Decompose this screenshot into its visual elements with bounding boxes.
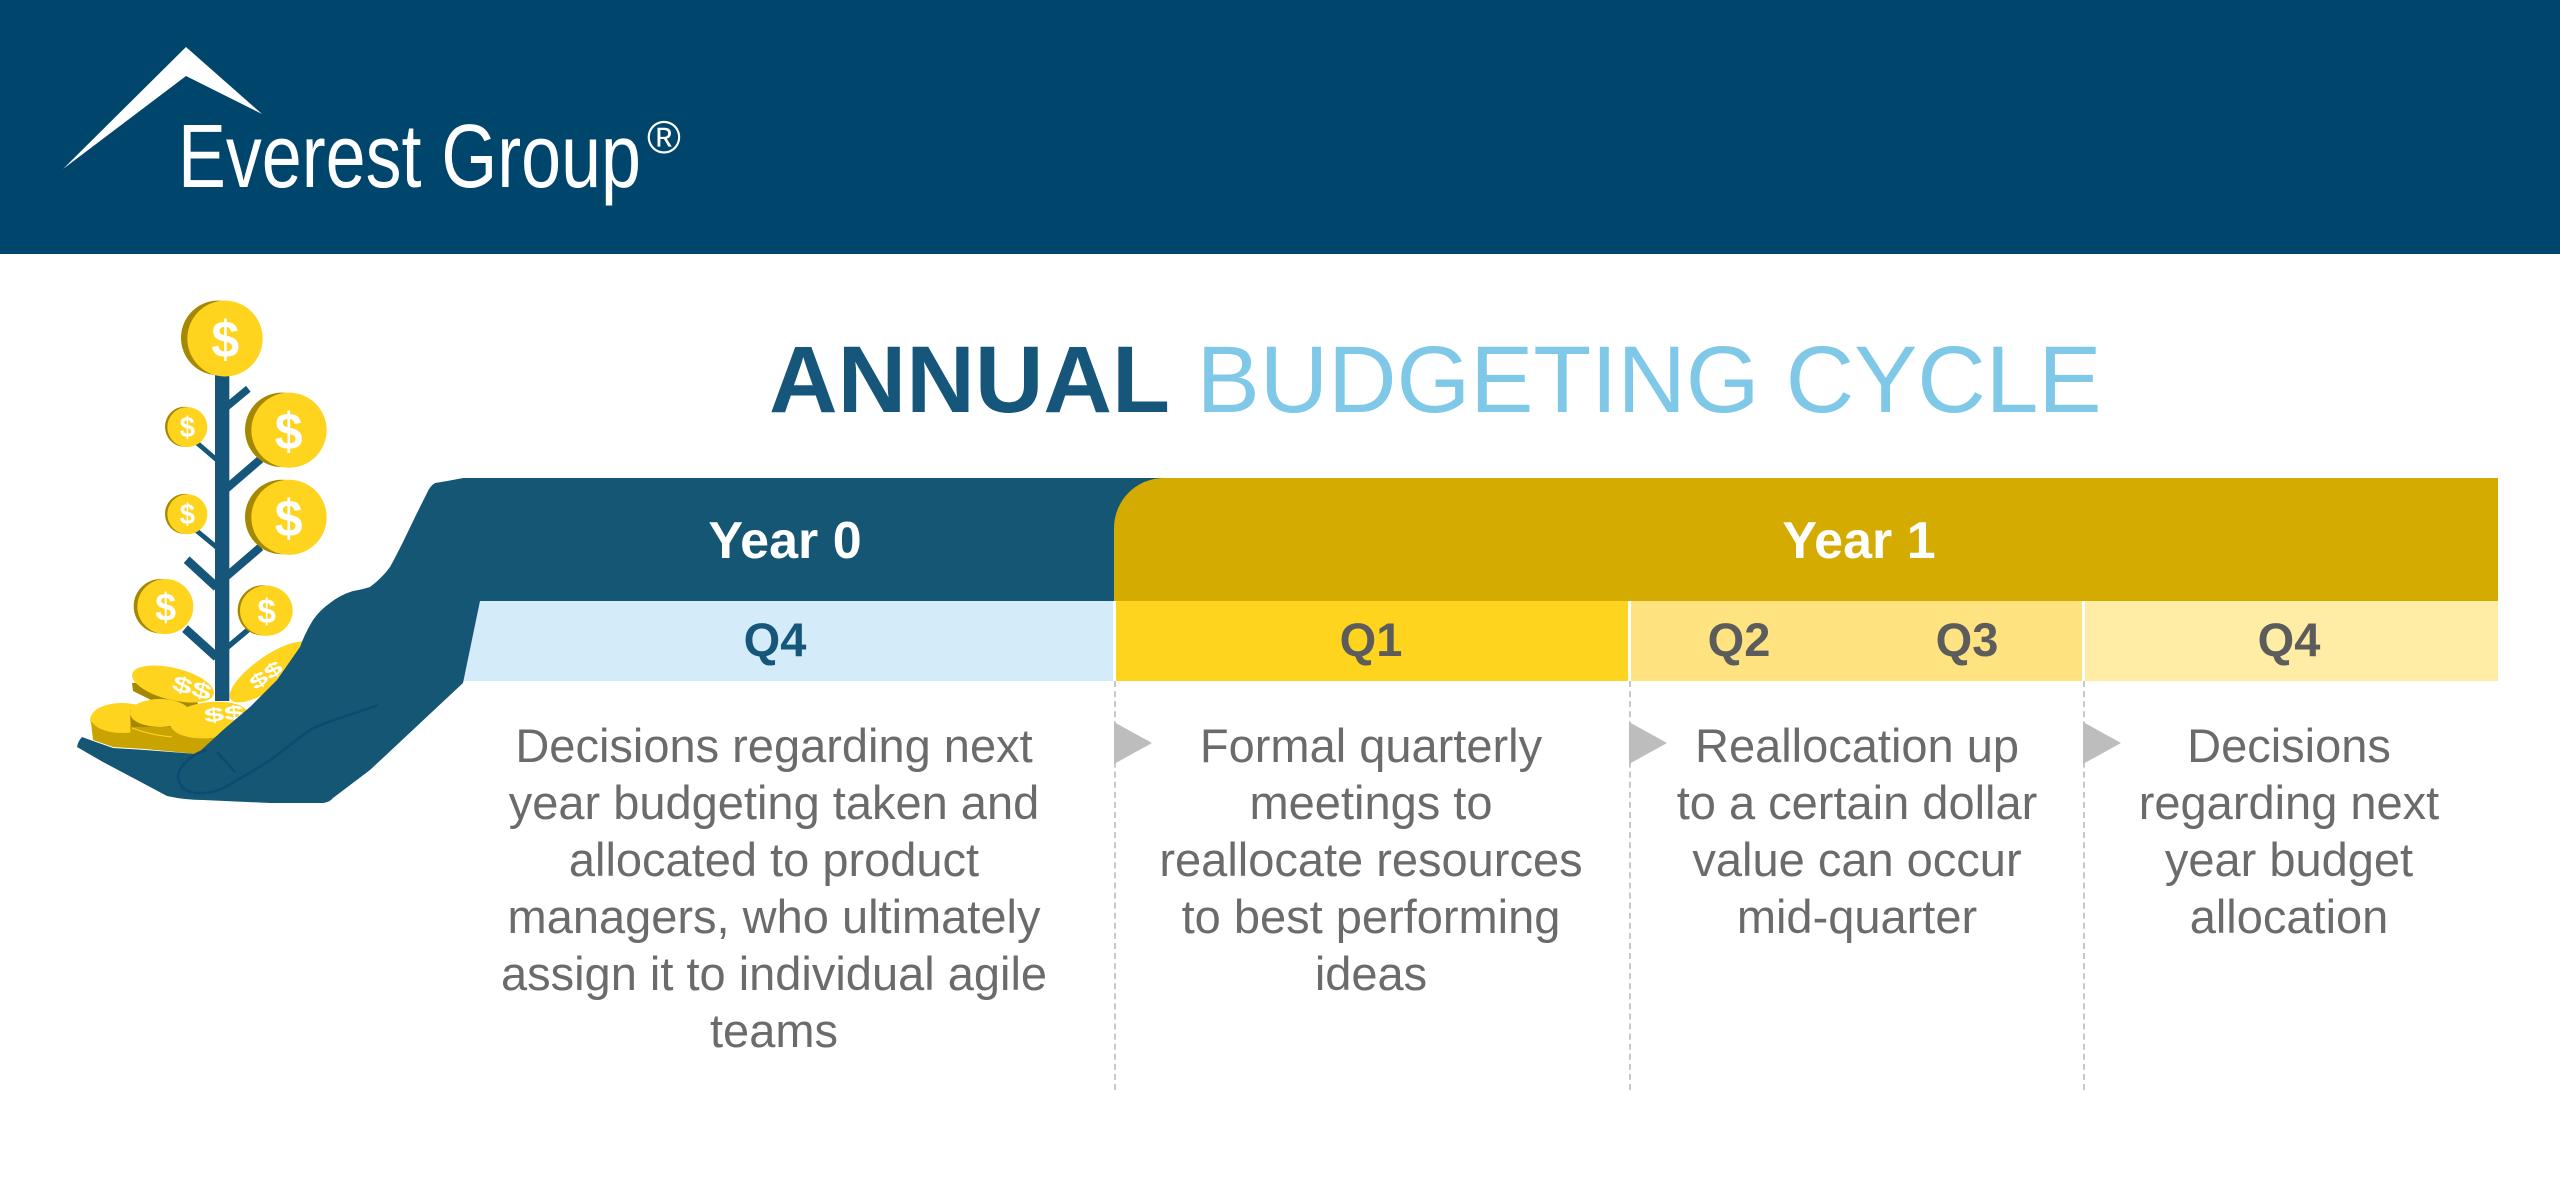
dashed divider Q1 and Q2	[1629, 681, 1631, 1090]
dashed divider year 0 and Q1	[1114, 681, 1116, 1090]
icon: large dollar coin middle right: $	[275, 489, 303, 547]
title: ANNUAL BUDGETING CYCLE	[769, 327, 2101, 433]
text block: year 0 Q4 description	[501, 719, 1047, 1057]
hand thumb outline	[178, 705, 378, 793]
label: Q2: Q2	[1708, 613, 1770, 666]
logo: Everest Group: ®	[647, 111, 681, 163]
header band with logo	[0, 0, 2560, 254]
text block: Q4 description: year budget	[2165, 833, 2413, 886]
arrow: Q4 marker	[2083, 722, 2121, 764]
text block: Q2 Q3 description: mid-quarter	[1737, 890, 1977, 943]
label: Q4 year 1: Q4	[2258, 613, 2320, 666]
text block: year 0 Q4 description: assign it to individual agile	[501, 947, 1047, 1000]
tilted coins behind the stem: $$	[245, 656, 287, 694]
quarter band: Q4 of year 1	[2085, 601, 2498, 681]
text block: year 0 Q4 description: managers, who ultimately	[508, 890, 1040, 943]
logo: Everest Group	[63, 47, 681, 207]
text block: year 0 Q4 description: year budgeting taken and	[509, 776, 1039, 829]
icon: top dollar coin	[181, 301, 263, 376]
arrow: Q1 marker	[1114, 722, 1152, 764]
label: Q3: Q3	[1936, 613, 1998, 666]
icon: small dollar coin middle left	[165, 494, 207, 534]
icon: medium dollar coin lower right	[238, 585, 293, 636]
text block: Q1 description: ideas	[1315, 947, 1427, 1000]
dashed divider Q3 and Q4	[2083, 681, 2085, 1090]
label: Year 0: Year 0	[708, 512, 862, 570]
text block: Q2 Q3 description: value can occur	[1692, 833, 2022, 886]
icon: top dollar coin: $	[211, 310, 239, 368]
text block: Q1 description	[1159, 719, 1583, 1000]
icon: small dollar coin upper left	[165, 407, 207, 447]
year 0 quarter band	[464, 601, 1113, 681]
arrow: Q2 marker	[1629, 722, 1667, 764]
tilted coins behind the stem: $$	[169, 671, 215, 705]
text block: Q1 description: meetings to	[1250, 776, 1492, 829]
icon: small dollar coin upper left: $	[180, 412, 195, 443]
icon: medium dollar coin lower left	[134, 579, 193, 634]
quarter band: Q1	[1116, 601, 1628, 681]
icon: medium dollar coin lower left: $	[155, 587, 176, 629]
text block: Q4 description: regarding next	[2139, 776, 2439, 829]
text block: Q1 description: to best performing	[1182, 890, 1560, 943]
text block: Q2 Q3 description: to a certain dollar	[1677, 776, 2037, 829]
text block: Q1 description: reallocate resources	[1159, 833, 1583, 886]
plant stem and branches, plus hanging coins	[134, 301, 327, 796]
text block: year 0 Q4 description: teams	[710, 1004, 838, 1057]
text block: Q1 description: Formal quarterly	[1200, 719, 1542, 772]
icon: money plant growing from a hand	[77, 300, 480, 803]
text block: Q2 Q3 description	[1677, 719, 2037, 943]
label: Q4 year 0: Q4	[744, 613, 806, 666]
icon: large dollar coin middle right	[245, 480, 327, 555]
text block: Q4 description	[2139, 719, 2439, 943]
coins stacked in the palm: $$	[203, 702, 245, 727]
icon: large dollar coin upper right	[245, 393, 327, 468]
icon: small dollar coin middle left: $	[180, 499, 195, 530]
text block: year 0 Q4 description: Decisions regarding next	[515, 719, 1033, 772]
coins stacked in the palm	[90, 698, 252, 754]
year 1 bar	[1114, 478, 2498, 601]
text block: Q4 description: Decisions	[2187, 719, 2391, 772]
year 0 bar	[470, 478, 1170, 601]
logo: Everest Group: Everest Group	[178, 107, 641, 207]
label: Q1: Q1	[1340, 613, 1402, 666]
text block: Q2 Q3 description: Reallocation up	[1695, 719, 2019, 772]
text block: Q4 description: allocation	[2190, 890, 2388, 943]
label: Year 1: Year 1	[1782, 512, 1936, 570]
icon: large dollar coin upper right: $	[275, 402, 303, 460]
icon: medium dollar coin lower right: $	[257, 593, 276, 631]
text block: year 0 Q4 description: allocated to product	[569, 833, 979, 886]
hand	[77, 478, 500, 803]
quarter band: Q2 and Q3	[1631, 601, 2082, 681]
tilted coins behind the stem	[128, 631, 318, 713]
